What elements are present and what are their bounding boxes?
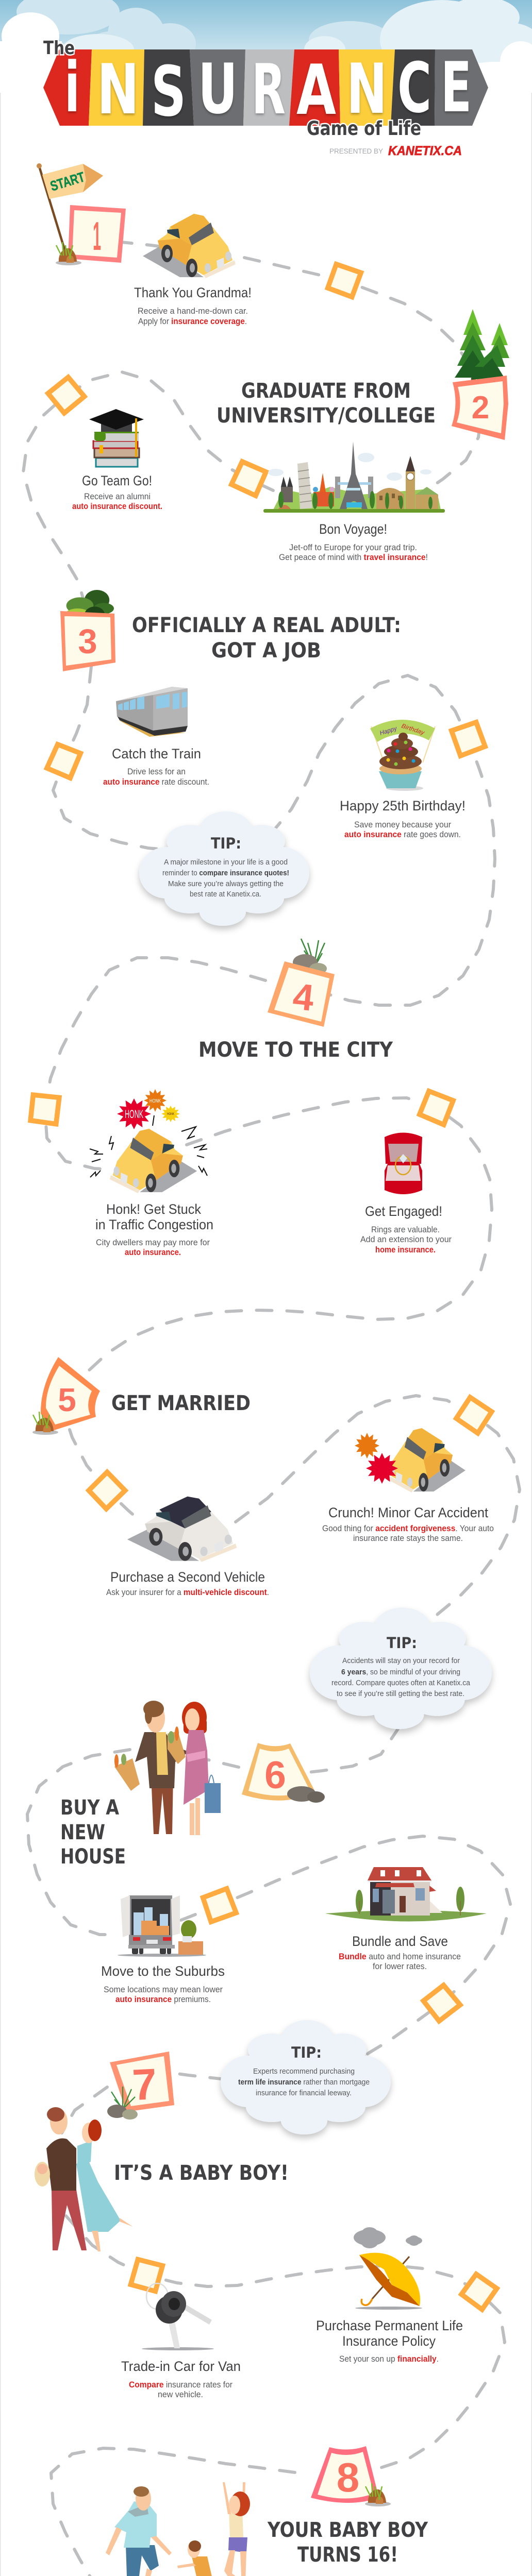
card: Happy Birthday: auto insurance rate goes down. xyxy=(344,830,461,839)
banner color stripes xyxy=(43,49,488,126)
card: engaged: home insurance. xyxy=(375,1245,436,1255)
step 5 number box: 5 xyxy=(58,1381,76,1418)
crashed car xyxy=(355,1428,466,1493)
icon: graduation cap on books xyxy=(89,409,144,467)
card: life insurance: Set your son up financially. xyxy=(339,2354,439,2364)
heading: got a job: GOT A JOB xyxy=(211,639,321,663)
tip cloud 1: A major milestone in your life is a good xyxy=(164,858,288,867)
card: crunch: insurance rate stays the same. xyxy=(353,1534,463,1543)
icon: train xyxy=(116,687,188,737)
card: second vehicle xyxy=(106,1569,269,1597)
heading: buy a new house: NEW xyxy=(60,1821,105,1844)
card: suburbs: auto insurance premiums. xyxy=(115,1995,211,2004)
plant at step 7 xyxy=(107,2087,138,2120)
card: crunch xyxy=(322,1505,494,1543)
diamond spaces xyxy=(89,1397,492,1509)
step 1 number box: 1 xyxy=(93,213,101,259)
tip cloud 1 xyxy=(139,811,309,926)
icon: birthday cupcake: Birthday xyxy=(401,722,426,736)
card: engaged: Get Engaged! xyxy=(365,1204,442,1219)
card: Thank You Grandma: Apply for insurance coverage. xyxy=(138,317,247,326)
presented by xyxy=(329,144,462,158)
step 4 number box: 4 xyxy=(291,976,316,1019)
card: Bon Voyage: Bon Voyage! xyxy=(319,521,387,537)
tip cloud 3: term life insurance rather than mortgage xyxy=(238,2078,370,2087)
card: suburbs: Some locations may mean lower xyxy=(104,1985,223,1994)
card: trade-in xyxy=(121,2359,241,2399)
card: bundle: Bundle auto and home insurance xyxy=(339,1952,461,1961)
card: trade-in: new vehicle. xyxy=(158,2390,203,2399)
card: bundle xyxy=(339,1934,461,1971)
tip cloud 3 xyxy=(221,2020,391,2134)
tip cloud 1: TIP: xyxy=(211,835,241,852)
card: second vehicle: Purchase a Second Vehicle xyxy=(110,1569,265,1585)
word INSURANCE: C xyxy=(397,48,431,128)
tip cloud 2: record. Compare quotes often at Kanetix.ca xyxy=(331,1679,471,1687)
heading: turns 16: YOUR BABY BOY xyxy=(267,2518,428,2542)
word INSURANCE: U xyxy=(198,49,238,129)
tip cloud 2: Accidents will stay on your record for xyxy=(342,1657,460,1665)
step 6 number box: 6 xyxy=(264,1753,286,1797)
rock at step 6 xyxy=(287,1786,325,1803)
card: Catch the Train: auto insurance rate discount. xyxy=(103,777,209,787)
rock and grass at step 5 xyxy=(32,1412,58,1435)
rock and grass at step 1 xyxy=(56,242,81,265)
card: honk: in Traffic Congestion xyxy=(95,1217,213,1232)
car with honks: HONK xyxy=(149,1098,161,1104)
card: Go Team Go xyxy=(72,473,162,511)
step 8 number box: 8 xyxy=(337,2454,359,2500)
heading: got a job: OFFICIALLY A REAL ADULT: xyxy=(132,614,401,637)
word INSURANCE: i xyxy=(64,47,80,128)
tip cloud 2: 6 years, so be mindful of your driving xyxy=(341,1668,460,1676)
plant above step 4 xyxy=(293,939,327,974)
couple with groceries xyxy=(114,1701,221,1835)
card: Happy Birthday: Happy 25th Birthday! xyxy=(340,798,466,814)
tip cloud 3: Experts recommend purchasing xyxy=(253,2067,355,2076)
trees above step 2 xyxy=(455,309,509,384)
heading: graduate: GRADUATE FROM xyxy=(241,379,411,403)
heading: baby boy: IT’S A BABY BOY! xyxy=(114,2161,289,2185)
card: Catch the Train: Catch the Train xyxy=(112,746,201,761)
card: Happy Birthday xyxy=(340,798,466,839)
diamond spaces xyxy=(48,377,266,496)
tip cloud 3: insurance for financial leeway. xyxy=(256,2089,352,2097)
step 7 number box xyxy=(110,2052,174,2112)
words Game of Life: Game of Life xyxy=(307,117,421,140)
tip cloud 2: to see if you’re still getting the best rate. xyxy=(337,1690,464,1698)
card: Go Team Go: Go Team Go! xyxy=(82,473,152,488)
card: Happy Birthday: Save money because your xyxy=(354,820,451,829)
start sign xyxy=(37,163,103,252)
card: second vehicle: Ask your insurer for a multi-vehicle discount. xyxy=(106,1588,269,1597)
word INSURANCE: E xyxy=(441,47,472,128)
card: engaged xyxy=(360,1204,452,1255)
icon: car keys xyxy=(142,2283,214,2350)
white second vehicle xyxy=(127,1497,237,1562)
word INSURANCE: S xyxy=(151,52,186,132)
heading: got a job xyxy=(132,614,401,663)
moving truck xyxy=(118,1895,206,1957)
car: Thank You Grandma xyxy=(143,214,236,278)
heading: buy a new house: HOUSE xyxy=(60,1845,126,1869)
diamond spaces xyxy=(30,1091,453,1125)
family playing soccer xyxy=(106,2482,250,2576)
presented by: PRESENTED BY xyxy=(329,147,383,155)
card: honk: auto insurance. xyxy=(125,1248,181,1257)
icon: birthday cupcake xyxy=(370,720,435,791)
step 7 number box: 7 xyxy=(131,2060,158,2110)
diamond spaces xyxy=(203,1889,460,2021)
diamond space xyxy=(328,264,361,297)
card: Bon Voyage: Get peace of mind with travel insurance! xyxy=(279,553,428,562)
step 3 number box: 3 xyxy=(78,622,97,661)
tip cloud 2 xyxy=(310,1607,492,1729)
step 5 number box xyxy=(41,1357,100,1431)
step 1 number box xyxy=(68,205,126,263)
title banner xyxy=(43,38,488,140)
icon: birthday cupcake: Happy xyxy=(379,724,398,737)
card: Thank You Grandma: Receive a hand-me-down car. xyxy=(138,307,248,316)
card: Go Team Go: Receive an alumni xyxy=(84,492,151,501)
card: suburbs xyxy=(101,1963,225,2004)
word The: The xyxy=(43,38,75,59)
heading: turns 16: TURNS 16! xyxy=(297,2543,398,2567)
card: Bon Voyage: Jet-off to Europe for your grad trip. xyxy=(289,543,417,552)
tip cloud 2: TIP: xyxy=(387,1634,417,1652)
card: honk xyxy=(95,1201,213,1257)
bush above step 3 xyxy=(64,590,114,623)
tip cloud 3: TIP: xyxy=(291,2044,322,2061)
card: honk: Honk! Get Stuck xyxy=(106,1201,201,1217)
card: crunch: Good thing for accident forgiveness. Your auto xyxy=(322,1524,494,1533)
card: Thank You Grandma: Thank You Grandma! xyxy=(134,285,252,300)
card: bundle: Bundle and Save xyxy=(352,1934,448,1949)
heading: buy a new house xyxy=(60,1796,126,1869)
card: honk: City dwellers may pay more for xyxy=(96,1238,210,1247)
card: suburbs: Move to the Suburbs xyxy=(101,1963,225,1979)
house xyxy=(325,1867,487,1922)
step 2 number box xyxy=(452,376,508,440)
card: life insurance xyxy=(316,2318,463,2364)
word INSURANCE: A xyxy=(296,50,336,130)
heading: graduate: UNIVERSITY/COLLEGE xyxy=(217,404,436,428)
card: Go Team Go: auto insurance discount. xyxy=(72,502,162,511)
rock and grass at step 8 xyxy=(365,2483,391,2506)
card: Thank You Grandma xyxy=(134,285,252,326)
card: Catch the Train: Drive less for an xyxy=(127,767,186,776)
card: trade-in: Trade-in Car for Van xyxy=(121,2359,241,2374)
word INSURANCE: N xyxy=(346,49,387,129)
icon: umbrella with clouds xyxy=(354,2227,422,2310)
car with honks xyxy=(90,1089,207,1193)
couple with baby xyxy=(35,2107,133,2251)
icon: engagement ring box xyxy=(385,1132,422,1194)
icon: European landmarks xyxy=(263,442,445,513)
heading: turns 16 xyxy=(267,2518,428,2567)
heading: graduate xyxy=(217,379,436,428)
sky header with clouds xyxy=(0,0,532,93)
word INSURANCE xyxy=(64,47,472,132)
diamond spaces xyxy=(131,2260,497,2310)
card: trade-in: Compare insurance rates for xyxy=(129,2380,232,2389)
tip cloud 1: Make sure you’re always getting the xyxy=(168,880,284,888)
step 6 number box xyxy=(242,1743,314,1801)
card: engaged: Rings are valuable. xyxy=(371,1225,440,1234)
card: bundle: for lower rates. xyxy=(373,1962,427,1971)
tip cloud 1: best rate at Kanetix.ca. xyxy=(190,890,261,899)
tip cloud 1: reminder to compare insurance quotes! xyxy=(162,869,289,877)
step 2 number box: 2 xyxy=(472,390,489,426)
heading: move to the city: MOVE TO THE CITY xyxy=(198,1038,393,1062)
card: engaged: Add an extension to your xyxy=(360,1235,452,1244)
diamond spaces xyxy=(47,722,485,778)
card: life insurance: Insurance Policy xyxy=(342,2333,436,2349)
card: crunch: Crunch! Minor Car Accident xyxy=(328,1505,488,1520)
car with honks: HONK xyxy=(125,1108,143,1121)
step 3 number box xyxy=(60,611,115,671)
heading: buy a new house: BUY A xyxy=(60,1796,119,1820)
heading: get married: GET MARRIED xyxy=(111,1392,251,1415)
card: life insurance: Purchase Permanent Life xyxy=(316,2318,463,2333)
step 8 number box xyxy=(311,2446,379,2503)
card: Bon Voyage xyxy=(279,521,428,562)
word INSURANCE: N xyxy=(97,49,139,130)
car with honks: HONK xyxy=(167,1113,174,1116)
presented by: KANETIX.CA xyxy=(388,144,462,158)
word INSURANCE: R xyxy=(252,49,286,130)
card: Catch the Train xyxy=(103,746,209,787)
start sign: START xyxy=(48,169,87,194)
step 4 number box xyxy=(268,961,335,1027)
